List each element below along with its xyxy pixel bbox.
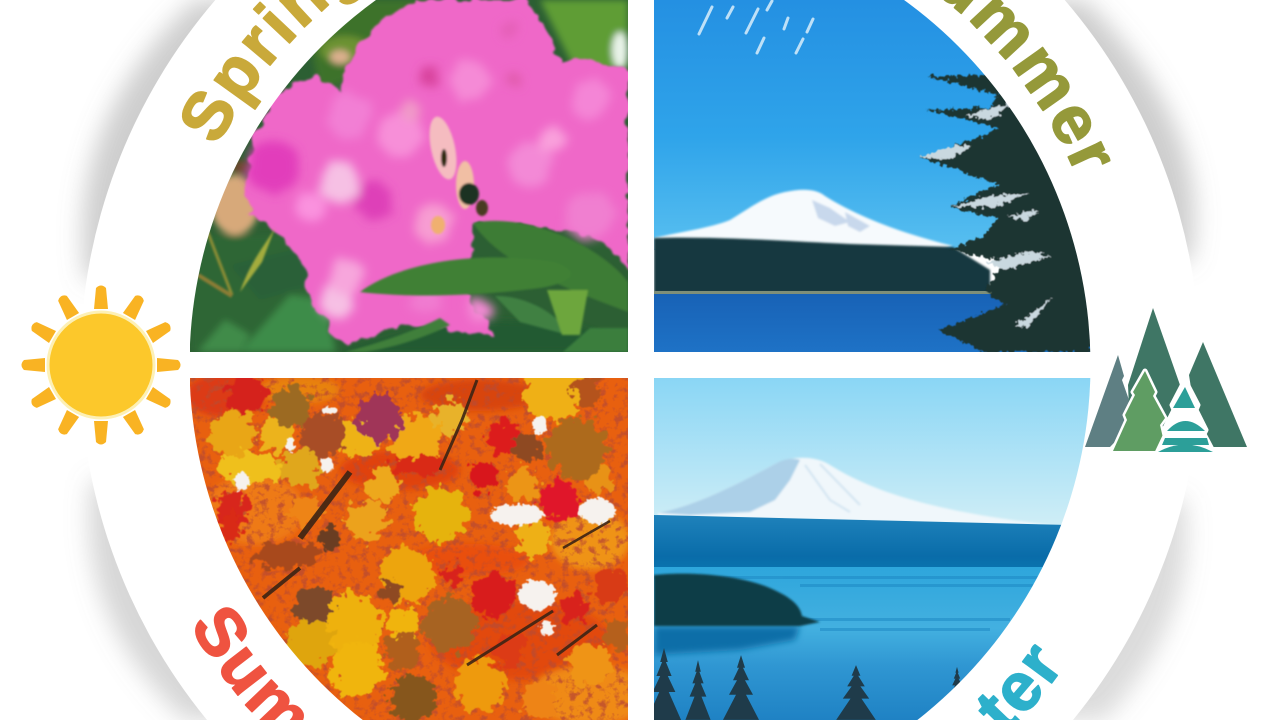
lake [654, 567, 1043, 720]
snow mountain [658, 458, 1060, 526]
season labels [182, 0, 1110, 720]
forested island [654, 574, 820, 626]
panel: spring rhododendron photo [190, 0, 628, 352]
autumn leaves [210, 361, 631, 720]
red leaves [227, 375, 267, 415]
teal fir silhouette [1157, 380, 1214, 453]
panel: summer mountain lake photo [654, 0, 1092, 352]
snow on branches [920, 100, 1052, 328]
island reflection [654, 626, 800, 655]
lake streaks [722, 576, 1038, 631]
colour blocks [185, 373, 650, 720]
winter sky [654, 378, 1092, 528]
rain streaks [699, 1, 813, 53]
icon: sun [22, 286, 180, 444]
fir tree [920, 62, 1092, 352]
foliage background [190, 0, 628, 352]
yellow leaves [521, 378, 585, 426]
sun rays [22, 286, 180, 444]
shadow: top left [83, 0, 300, 280]
sky gaps [234, 406, 615, 636]
stamens and dark gaps [425, 114, 488, 234]
shoreline [654, 291, 994, 294]
green leaves [198, 221, 628, 352]
brown leaves [270, 388, 310, 428]
shadow: bottom right [1000, 498, 1187, 720]
pink flower cluster [246, 0, 628, 345]
centre mountain [1128, 308, 1180, 430]
shadow: bottom left [89, 480, 300, 720]
icon: mountain and trees logo [1085, 308, 1247, 453]
green fir [1113, 371, 1166, 451]
summer sky [654, 0, 1000, 250]
teal fir bands [1158, 387, 1213, 452]
shadow: top right [980, 0, 1195, 262]
forest band [654, 238, 990, 293]
panel: autumn maple leaves photo [190, 378, 628, 720]
branches [263, 380, 610, 665]
mottled texture [190, 378, 628, 720]
foreground firs [647, 648, 964, 720]
lake [654, 294, 1092, 352]
panel: winter mountain lake photo [647, 378, 1092, 720]
snow shadow patches [812, 200, 850, 226]
grey mountain [1085, 355, 1136, 447]
flower highlights and shadows [247, 21, 614, 322]
blue shaded face [658, 459, 800, 515]
sun disc [48, 312, 154, 418]
distant water band [654, 515, 1070, 567]
snow mountain [654, 190, 953, 250]
right mountain [1189, 342, 1247, 447]
